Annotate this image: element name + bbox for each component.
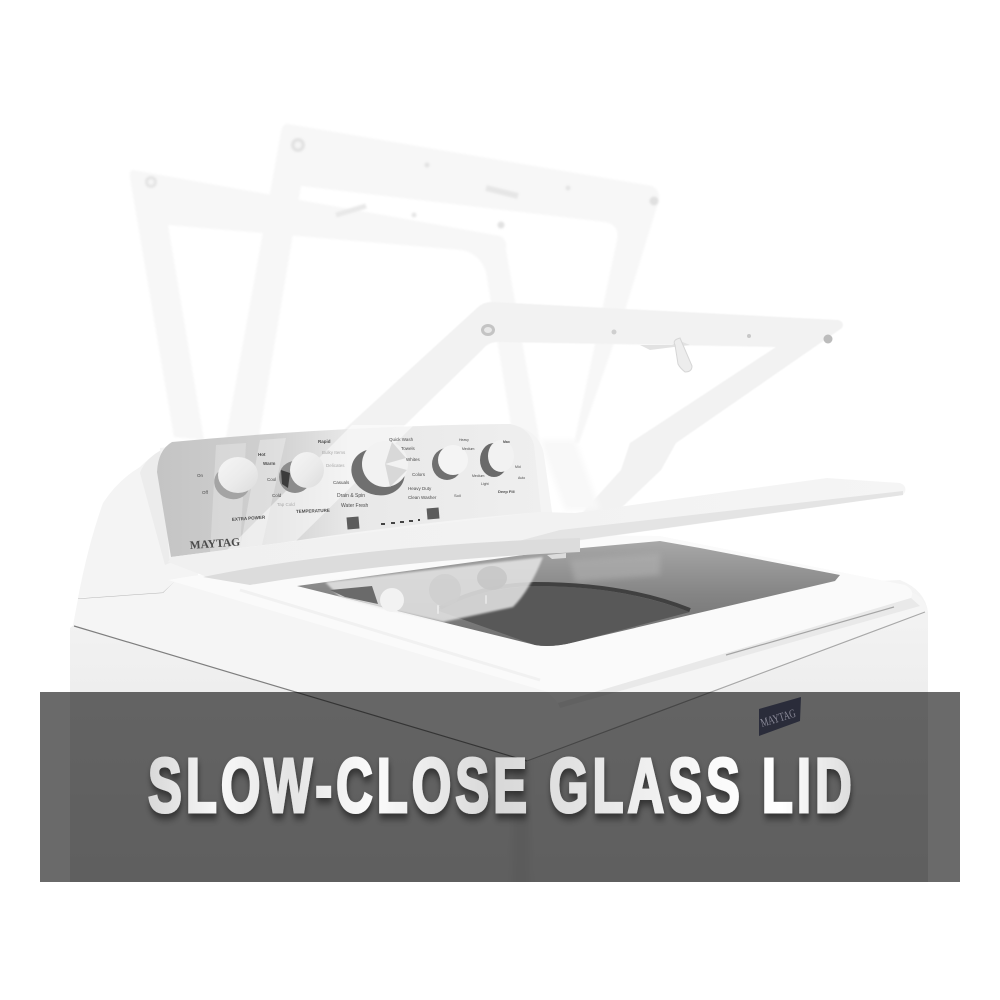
stainless panel — [157, 424, 541, 557]
console labels: Mid — [515, 465, 521, 469]
infographic canvas — [40, 136, 960, 882]
console labels: Max — [503, 440, 510, 444]
console labels: Tap Cold — [277, 502, 295, 507]
console labels: Auto — [518, 476, 525, 480]
cabinet top deck — [73, 560, 928, 762]
console labels — [197, 437, 525, 522]
washer rim frame — [168, 535, 920, 708]
brand logo: MAYTAG — [189, 536, 241, 552]
knob 4 — [432, 445, 468, 480]
console labels: Warm — [263, 461, 275, 466]
console labels: Hot — [258, 452, 266, 457]
console labels: Bulky Items — [322, 450, 346, 455]
lid underside — [203, 538, 580, 585]
console labels: Whites — [406, 457, 421, 462]
console labels: Heavy — [459, 438, 469, 442]
console labels: TEMPERATURE — [296, 508, 330, 514]
console labels: Off — [202, 490, 209, 495]
console labels: Delicates — [326, 463, 345, 468]
badge on cabinet — [759, 697, 801, 736]
console labels: Casuals — [333, 480, 350, 485]
start button — [346, 516, 360, 530]
control console — [157, 424, 560, 572]
knob 2 — [279, 452, 324, 493]
console labels: EXTRA POWER — [232, 515, 266, 522]
ghost lid: mid open position — [250, 302, 843, 520]
ghost lid: nearly closed position — [168, 478, 905, 585]
console labels: Rapid — [318, 439, 331, 444]
knob 5 — [480, 440, 514, 477]
console labels: Heavy Duty — [408, 486, 432, 491]
console labels: Cool — [267, 477, 276, 482]
knob 1 — [210, 457, 258, 504]
console labels: Water Fresh — [341, 503, 369, 509]
console labels: Towels — [401, 446, 416, 451]
back wall highlight — [570, 553, 660, 582]
badge on cabinet: MAYTAG — [759, 706, 798, 730]
cabinet shoulder and console end cap — [78, 441, 200, 599]
pause button — [427, 507, 440, 520]
title: SLOW-CLOSE GLASS LID — [148, 742, 856, 829]
lid passing over the panel — [224, 425, 414, 553]
ghost lid: high open position — [225, 124, 659, 443]
ghost lid: farthest open position — [130, 170, 540, 443]
console labels: Cold — [272, 493, 282, 498]
console labels: Soil — [454, 493, 461, 498]
console labels: On — [197, 473, 204, 478]
reflected control panel — [325, 557, 543, 622]
console labels: Colors — [412, 472, 426, 477]
knob 3 — [345, 441, 411, 502]
console labels: Clean Washer — [408, 495, 437, 500]
drum — [436, 586, 690, 646]
console labels: Light — [481, 482, 489, 486]
console labels: Drain & Spin — [337, 493, 365, 499]
console labels: Medium — [462, 447, 475, 451]
translucent title banner — [40, 692, 960, 882]
washer cabinet body — [70, 580, 928, 900]
console labels: Quick Wash — [389, 437, 414, 442]
console labels: Medium — [472, 474, 485, 478]
status indicators — [381, 519, 420, 525]
tub opening — [297, 541, 840, 646]
console labels: Deep Fill — [498, 489, 515, 494]
